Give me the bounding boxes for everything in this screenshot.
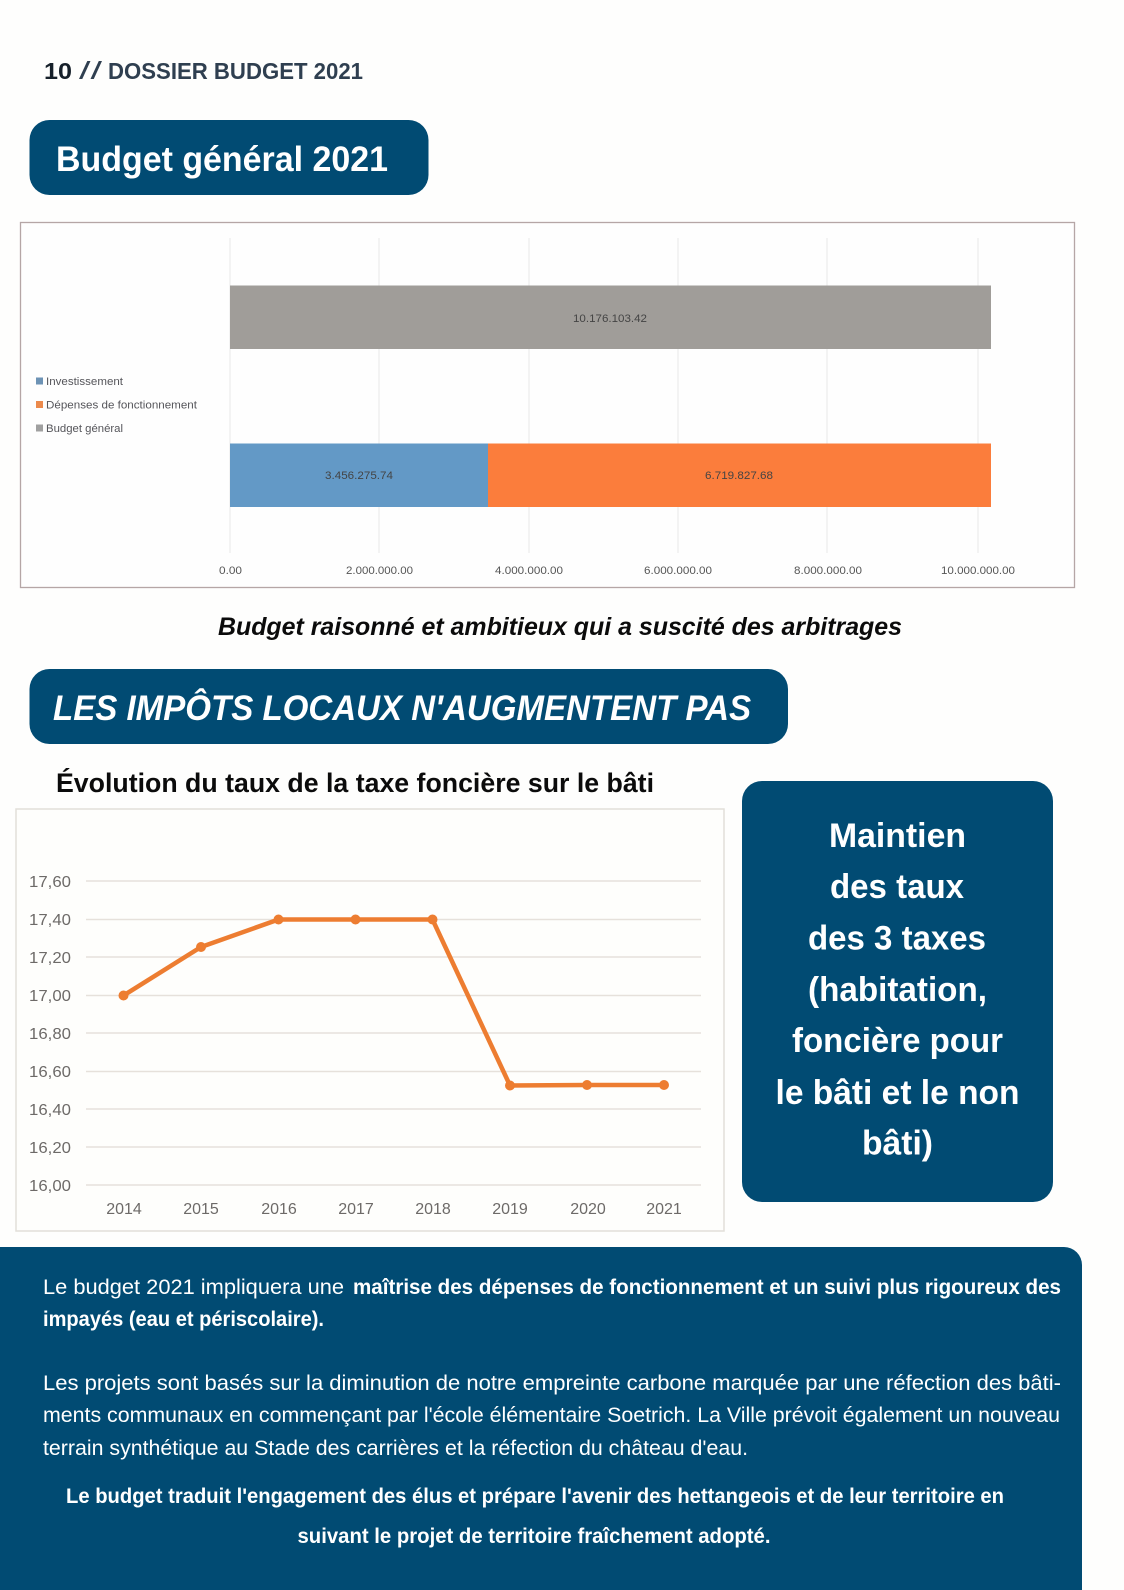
conclusion: Le budget traduit l'engagement des élus et prépare l'avenir des hettangeois et de leur territoire en	[66, 1485, 1004, 1508]
paragraph: maîtrise des dépenses: impayés (eau et périscolaire).	[43, 1308, 324, 1331]
data line	[118, 914, 669, 1090]
conclusion: suivant le projet de territoire fraîchement adopté.	[298, 1525, 770, 1548]
callout: maintien des taux: (habitation,	[808, 971, 987, 1009]
paragraph: maîtrise des dépenses: Le budget 2021 impliquera une	[43, 1276, 344, 1299]
bar: Budget général	[230, 286, 991, 349]
y axis labels: 16,40	[29, 1102, 71, 1119]
header: page number and section: 10	[44, 58, 72, 84]
legend	[36, 376, 197, 435]
x axis labels: 10.000.000.00	[941, 565, 1015, 577]
y axis labels: 17,60	[29, 874, 71, 891]
paragraph: projets: Les projets sont basés sur la diminution de notre empreinte carbone marquée par une réfection des bâti-	[43, 1372, 1061, 1395]
x axis years: 2019	[492, 1201, 528, 1218]
legend: Dépenses de fonctionnement	[46, 400, 197, 412]
caption: Budget raisonné et ambitieux qui a suscité des arbitrages	[218, 613, 902, 641]
x axis labels: 4.000.000.00	[495, 565, 563, 577]
heading: Budget général 2021	[30, 120, 428, 195]
x axis years: 2018	[415, 1201, 451, 1218]
x axis years: 2021	[646, 1201, 682, 1218]
paragraph: projets: terrain synthétique au Stade des carrières et la réfection du château d'eau.	[43, 1437, 748, 1460]
bar: Budget général: 10.176.103.42	[573, 313, 647, 325]
header: page number and section: DOSSIER BUDGET 2021	[108, 58, 363, 84]
y axis labels: 17,00	[29, 988, 71, 1005]
callout: maintien des taux: des taux	[830, 868, 964, 906]
heading: Budget général 2021: Budget général 2021	[56, 140, 388, 179]
bar: Dépenses de fonctionnement: 6.719.827.68	[705, 470, 773, 482]
heading: Les impôts locaux n'augmentent pas	[30, 669, 788, 744]
callout: maintien des taux: le bâti et le non	[776, 1074, 1020, 1112]
paragraph: maîtrise des dépenses: maîtrise des dépenses de fonctionnement et un suivi plus rigoureux des	[353, 1276, 1061, 1299]
paragraph: maîtrise des dépenses	[43, 1276, 1061, 1331]
y axis labels: 16,80	[29, 1026, 71, 1043]
callout: maintien des taux: des 3 taxes	[808, 920, 986, 958]
bar: Investissement: 3.456.275.74	[325, 470, 393, 482]
panel: budget bar chart	[20, 222, 1074, 588]
x axis labels: 8.000.000.00	[794, 565, 862, 577]
subtitle: Évolution du taux de la taxe foncière sur le bâti	[56, 767, 654, 798]
paragraph: projets: ments communaux en commençant par l'école élémentaire Soetrich. La Ville prévoit également un nouveau	[43, 1404, 1060, 1427]
callout: maintien des taux: foncière pour	[792, 1022, 1003, 1060]
y axis labels: 17,20	[29, 950, 71, 967]
x axis labels: 6.000.000.00	[644, 565, 712, 577]
x axis labels: 0.00	[219, 565, 242, 577]
panel: bottom text block	[0, 1247, 1082, 1590]
callout: maintien des taux: bâti)	[862, 1124, 933, 1162]
x axis years: 2020	[570, 1201, 606, 1218]
x axis years: 2014	[106, 1201, 142, 1218]
y axis labels: 17,40	[29, 912, 71, 929]
legend: Investissement	[46, 376, 123, 388]
callout: maintien des taux: Maintien	[829, 817, 966, 855]
legend: Budget général	[46, 423, 123, 435]
x axis labels: 2.000.000.00	[346, 565, 413, 577]
heading: Les impôts locaux n'augmentent pas: LES IMPÔTS LOCAUX N'AUGMENTENT PAS	[53, 688, 751, 728]
y axis labels: 16,60	[29, 1064, 71, 1081]
x axis years: 2017	[338, 1201, 374, 1218]
header: page number and section: //	[79, 57, 102, 85]
paragraph: projets	[43, 1372, 1061, 1460]
y axis labels	[29, 874, 71, 1195]
bar: Investissement	[230, 444, 488, 507]
x axis years	[106, 1201, 682, 1218]
bar: Dépenses de fonctionnement	[488, 444, 991, 507]
panel: line chart	[16, 809, 724, 1231]
y axis labels: 16,00	[29, 1178, 71, 1195]
conclusion	[66, 1485, 1004, 1548]
x axis labels	[219, 565, 1015, 577]
callout: maintien des taux	[742, 781, 1053, 1202]
y axis labels: 16,20	[29, 1140, 71, 1157]
x axis years: 2015	[183, 1201, 219, 1218]
x axis years: 2016	[261, 1201, 297, 1218]
